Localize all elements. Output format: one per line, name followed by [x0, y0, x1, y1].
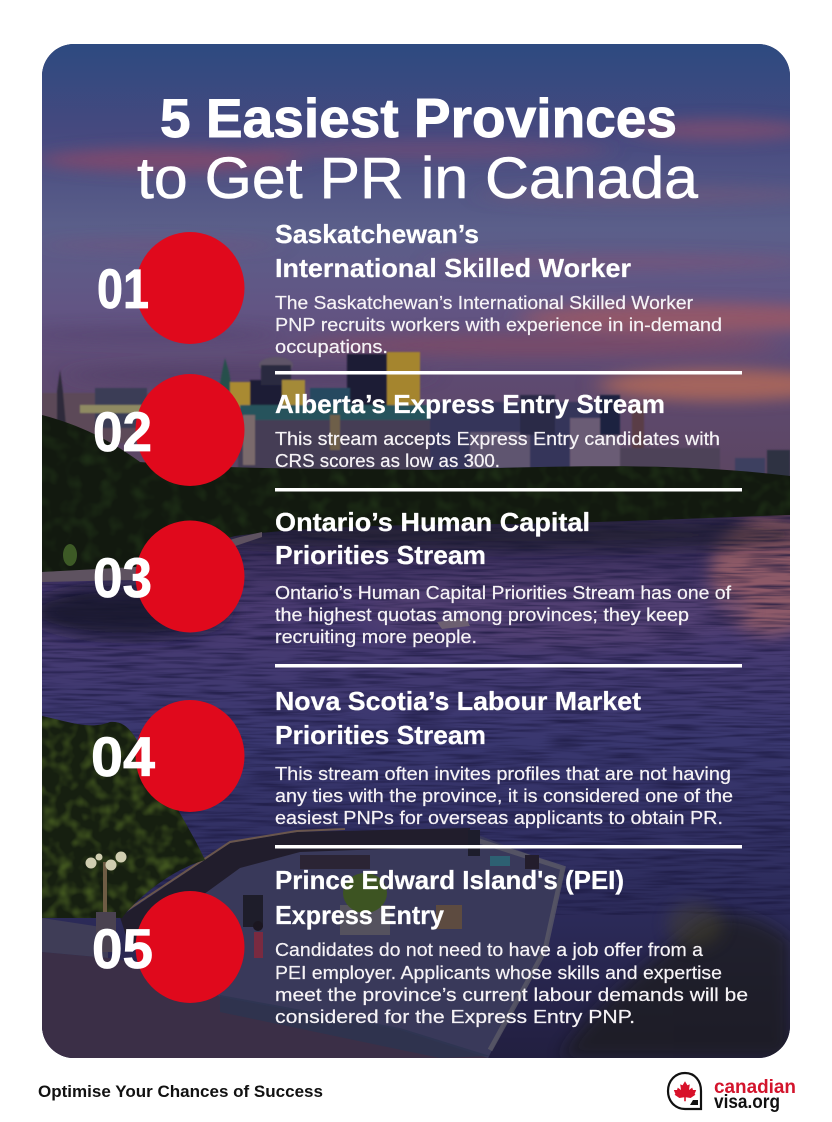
item 02 text: This stream accepts Express Entry candidates with [275, 429, 720, 449]
boardwalk and wall [42, 828, 565, 1058]
title: 5 Easiest Provinces [160, 87, 677, 149]
item 04 text: Priorities Stream [275, 720, 486, 750]
item 05 badge: 05 [92, 917, 153, 980]
logo: canadianvisa.org: visa.org [714, 1092, 780, 1113]
item 03 text: Priorities Stream [275, 540, 486, 570]
item 04 text: Nova Scotia’s Labour Market [275, 686, 641, 716]
title [137, 87, 699, 211]
item 04 badge: 04 [91, 725, 155, 788]
item 01 text: occupations. [275, 337, 388, 357]
logo: canadianvisa.org [668, 1073, 796, 1113]
item 04 text: This stream often invites profiles that are not having [275, 764, 731, 784]
item 04 badge [91, 700, 244, 812]
item 04 text [275, 686, 733, 828]
forested riverbank [42, 415, 790, 582]
item 03 text: recruiting more people. [275, 627, 477, 647]
item 05 text: PEI employer. Applicants whose skills and expertise [275, 963, 722, 983]
logo: canadianvisa.org: canadian [714, 1077, 796, 1098]
item 01 text: Saskatchewan’s [275, 219, 479, 249]
item 05 text: Prince Edward Island's (PEI) [275, 865, 624, 895]
item 04 text: easiest PNPs for overseas applicants to obtain PR. [275, 808, 723, 828]
title: to Get PR in Canada [137, 146, 699, 211]
item 01 badge: 01 [97, 257, 149, 320]
item 02 badge: 02 [93, 400, 152, 463]
foreground trees and lamp post [42, 716, 790, 1058]
footer tagline: Optimise Your Chances of Success [38, 1083, 323, 1101]
item 05 badge [92, 891, 244, 1003]
item 01 text: PNP recruits workers with experience in in-demand [275, 315, 722, 335]
item 02 text: Alberta’s Express Entry Stream [275, 389, 665, 419]
river water [30, 515, 830, 1058]
item 03 text: Ontario’s Human Capital [275, 507, 590, 537]
item 04 text: any ties with the province, it is considered one of the [275, 786, 733, 806]
item 01 text [275, 219, 722, 357]
item 05 text [275, 865, 748, 1027]
item 03 text: Ontario’s Human Capital Priorities Stream has one of [275, 583, 732, 603]
item 03 badge: 03 [93, 546, 152, 609]
item 01 text: The Saskatchewan’s International Skilled Worker [275, 293, 693, 313]
sky with sunset clouds [20, 44, 832, 484]
item 01 badge [97, 232, 244, 344]
item 05 text: Express Entry [275, 900, 445, 930]
item 02 text: CRS scores as low as 300. [275, 451, 500, 471]
item 03 badge [93, 520, 244, 632]
icon: maple leaf badge [668, 1073, 701, 1109]
item 02 badge [93, 374, 244, 486]
item 05 text: Candidates do not need to have a job offer from a [275, 940, 704, 960]
city skyline [42, 352, 790, 478]
item 05 text: considered for the Express Entry PNP. [275, 1007, 635, 1027]
item 01 text: International Skilled Worker [275, 253, 631, 283]
item 05 text: meet the province’s current labour demands will be [275, 985, 748, 1005]
item 02 text [275, 389, 720, 471]
item 03 text: the highest quotas among provinces; they keep [275, 605, 689, 625]
item 03 text [275, 507, 732, 647]
